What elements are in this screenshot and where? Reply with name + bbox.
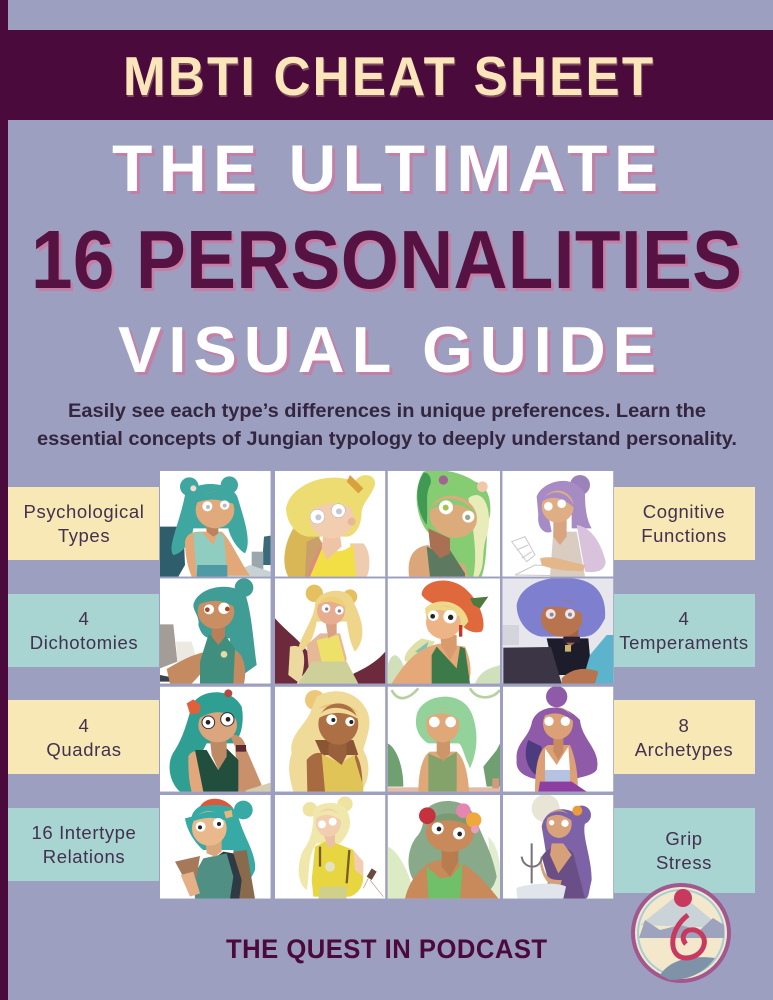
heading: 16 Personalities: 16 PERSONALITIES: [31, 213, 742, 306]
subtitle text: Easily see each type’s differences in unique preferences. Learn the: [68, 400, 706, 422]
label: 4 Temperaments: [614, 594, 755, 667]
portrait: teal hair with computer: [160, 578, 271, 684]
label: 16 Intertype Relations: Relations: [43, 846, 125, 867]
label: 8 Archetypes: 8: [679, 715, 689, 736]
portrait: blonde hair with yellow top: [275, 471, 385, 577]
title banner: MBTI Cheat Sheet: MBTI CHEAT SHEET: [123, 46, 653, 107]
portrait row 2, columns 1-2: [160, 687, 385, 899]
portrait grid: 16 characters: [160, 470, 613, 899]
portrait: teal hair with headband and bag: [160, 795, 271, 899]
portrait: green hair topknot: [388, 470, 500, 577]
label: Psychological Types: [8, 487, 159, 560]
label: 16 Intertype Relations: 16 Intertype: [32, 822, 136, 843]
portrait: purple hair sketching: [502, 471, 613, 577]
label: 16 Intertype Relations: [8, 808, 159, 881]
portrait: light green hair with plants: [388, 687, 500, 792]
label: 8 Archetypes: [614, 700, 755, 774]
subtitle text: essential concepts of Jungian typology to deeply understand personality.: [37, 428, 737, 450]
portrait: pale blonde with guitar: [275, 795, 385, 899]
label: 4 Quadras: [8, 700, 159, 774]
portrait: cream wavy hair, dark skin: [275, 687, 385, 792]
label: 8 Archetypes: Archetypes: [635, 739, 733, 760]
portrait: blue curly hair with laptop: [502, 578, 613, 684]
label: Grip Stress: Grip: [665, 828, 703, 849]
footer: podcast name: THE QUEST IN PODCAST: [226, 933, 547, 964]
portrait: blonde buns with maroon backdrop: [275, 578, 385, 684]
label: 4 Dichotomies: 4: [79, 608, 89, 629]
label: 4 Dichotomies: Dichotomies: [30, 632, 138, 653]
subtitle text: [37, 400, 737, 450]
logo: circular mountain badge: [633, 885, 729, 981]
label: 4 Temperaments: 4: [679, 608, 689, 629]
label: Psychological Types: Types: [58, 525, 110, 546]
title banner: MBTI Cheat Sheet: [0, 30, 773, 120]
label: Cognitive Functions: [614, 487, 755, 560]
label: Grip Stress: [614, 808, 755, 893]
portrait: teal hair with glasses: [160, 687, 271, 792]
label: 4 Quadras: 4: [79, 715, 89, 736]
portrait row 1, columns 1-2: [160, 471, 385, 684]
label: Cognitive Functions: Cognitive: [643, 501, 725, 522]
label: Psychological Types: Psychological: [24, 501, 144, 522]
label: Grip Stress: Stress: [656, 852, 712, 873]
portrait row 2, columns 3-4: [388, 686, 613, 899]
label: 4 Quadras: Quadras: [46, 739, 122, 760]
portrait: purple hair with candelabra and moon: [503, 794, 613, 899]
portrait: orange hat, blonde hair: [388, 578, 500, 684]
label: Cognitive Functions: Functions: [641, 525, 727, 546]
label: 4 Temperaments: Temperaments: [619, 632, 749, 653]
portrait: flower crown, green wavy hair: [388, 795, 500, 899]
portrait row 1, columns 3-4: [388, 470, 613, 684]
heading: Visual Guide: VISUAL GUIDE: [118, 313, 656, 386]
heading: The Ultimate: THE ULTIMATE: [112, 131, 658, 205]
portrait: purple long hair: [503, 686, 613, 792]
label: 4 Dichotomies: [8, 594, 159, 667]
portrait: teal hair at desk: [160, 471, 271, 577]
